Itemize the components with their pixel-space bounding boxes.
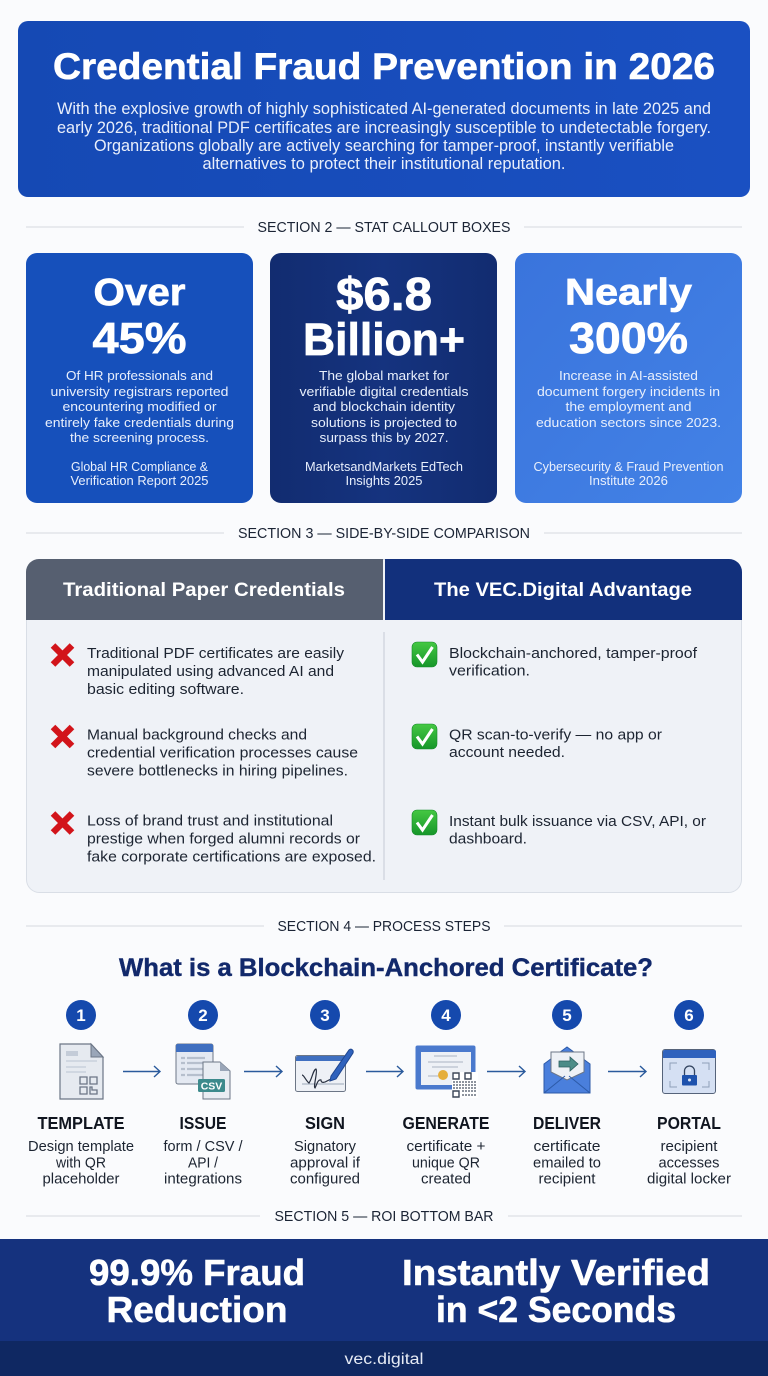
ROI stat: verification speed: in <2 Seconds [436,1289,676,1330]
ROI stat: fraud reduction: 99.9% Fraud [89,1252,305,1293]
benefit 2: QR scan-to-verify — no app or [449,726,662,744]
drawback 2: Manual background checks and [87,726,307,744]
stat card 3: the employment and [566,399,692,414]
stat card 2: Billion+ [303,314,465,365]
arrow [123,1066,160,1077]
left column header [26,559,383,620]
stat card 1: Of HR professionals and [66,368,213,383]
footer: vec.digital [344,1351,424,1368]
stat card 1: Over [94,272,186,314]
step 6 portal: digital locker [647,1172,731,1188]
step 1 template: 1 [76,1006,86,1025]
stat card 2: and blockchain identity [313,399,455,414]
step 1 template: placeholder [42,1172,120,1188]
stat card 1 [26,253,253,503]
step 3 sign: 3 [320,1006,330,1025]
step 1 template: Design template [28,1139,134,1155]
step 1 template [28,1000,134,1188]
ROI stat: verification speed [402,1252,710,1330]
step 2 issue [164,1000,243,1188]
stat card 1: university registrars reported [50,384,228,399]
step 5 deliver: DELIVER [533,1113,601,1133]
stat card 2: The global market for [319,368,450,383]
stat card 3: document forgery incidents in [537,384,720,399]
step 2 issue: form / CSV / [164,1139,243,1155]
drawback 1: basic editing software. [87,681,244,698]
stat card 2: surpass this by 2027. [320,430,448,445]
drawback 2: severe bottlenecks in hiring pipelines. [87,762,348,780]
step 5 deliver: 5 [562,1006,572,1025]
ROI bottom bar [0,1239,768,1342]
stat card 2: Insights 2025 [346,473,422,488]
arrow [608,1066,646,1077]
stat card 1: 45% [92,314,186,363]
right column header: The VEC.Digital Advantage [434,580,692,601]
drawback 3 [53,812,376,866]
step 1 template: with QR [55,1156,106,1172]
stat card 2 [270,253,497,503]
step 6 portal [647,1000,731,1188]
step 6 portal: PORTAL [657,1113,721,1133]
header intro text: With the explosive growth of highly sophisticated AI-generated documents in late 2025 and [57,100,711,118]
step 3 sign: Signatory [294,1139,357,1155]
title: Credential Fraud Prevention in 2026 [53,46,715,87]
step 4 generate: GENERATE [402,1113,490,1133]
header intro text: alternatives to protect their institutional reputation. [202,155,566,173]
benefit 1 [412,642,698,680]
stat card 2: $6.8 [336,268,432,320]
step 4 generate: unique QR [412,1156,480,1172]
step 6 portal: recipient [660,1139,718,1155]
benefit 3: Instant bulk issuance via CSV, API, or [449,813,706,830]
benefit 2 [412,724,662,761]
stat card 2: MarketsandMarkets EdTech [305,459,463,474]
section 4 label: SECTION 4 — PROCESS STEPS [278,919,490,935]
ROI stat: fraud reduction [89,1252,305,1330]
step 4 generate: certificate + [406,1139,486,1155]
step 2 issue: API / [188,1156,219,1172]
drawback 3: Loss of brand trust and institutional [87,812,333,830]
benefit 1: verification. [449,662,530,680]
stat card 3: Cybersecurity & Fraud Prevention [534,459,724,474]
stat card 3: education sectors since 2023. [536,415,721,430]
step 3 sign: SIGN [305,1113,345,1133]
step 6 portal: 6 [684,1006,694,1025]
icon: signature window with pen [296,1049,353,1092]
drawback 2: credential verification processes cause [87,744,358,762]
section 5 label: SECTION 5 — ROI BOTTOM BAR [274,1209,494,1225]
step 5 deliver: recipient [538,1172,596,1188]
stat card 2: verifiable digital credentials [300,384,469,399]
icon: form and CSV file [176,1044,230,1099]
stat card 3: Increase in AI-assisted [559,368,698,383]
stat card 1: Verification Report 2025 [70,473,208,488]
drawback 1: manipulated using advanced AI and [87,663,334,680]
icon: form and CSV file: CSV [201,1080,222,1092]
benefit 2: account needed. [449,744,565,761]
drawback 3: fake corporate certifications are exposed. [87,848,376,866]
step 4 generate: 4 [441,1006,451,1025]
ROI stat: verification speed: Instantly Verified [402,1252,710,1293]
step 3 sign [290,1000,361,1188]
stat card 3: 300% [569,314,688,363]
ROI stat: fraud reduction: Reduction [106,1289,288,1330]
stat card 2: solutions is projected to [311,415,457,430]
icon: portal window with padlock [662,1050,716,1094]
step 3 sign: configured [290,1172,360,1188]
arrow [487,1066,525,1077]
step 5 deliver [533,1000,601,1188]
drawback 1: Traditional PDF certificates are easily [87,645,344,662]
section 3 label: SECTION 3 — SIDE-BY-SIDE COMPARISON [238,526,530,542]
step 2 issue: 2 [198,1006,208,1025]
arrow [366,1066,403,1077]
benefit 3: dashboard. [449,830,527,848]
right column header [385,559,742,620]
drawback 1 [53,645,344,698]
left column header: Traditional Paper Credentials [63,580,345,601]
arrow [244,1066,282,1077]
icon: certificate with QR [416,1046,478,1098]
step 4 generate: created [421,1172,471,1188]
stat card 1: encountering modified or [62,399,217,414]
step 4 generate [402,1000,490,1188]
footer [0,1341,768,1376]
step 1 template: TEMPLATE [38,1113,124,1133]
step 6 portal: accesses [658,1156,720,1172]
comparison panel [26,559,742,892]
benefit 3 [412,810,706,848]
step 3 sign: approval if [290,1156,361,1172]
stat card 1: Global HR Compliance & [71,459,208,474]
header intro text [57,100,711,173]
icon: document with QR [60,1044,103,1099]
stat card 1: entirely fake credentials during [45,415,234,430]
icon: envelope with arrow [544,1047,590,1093]
stat card 1: the screening process. [70,430,209,445]
step 5 deliver: certificate [534,1139,600,1155]
drawback 3: prestige when forged alumni records or [87,830,360,848]
header intro text: Organizations globally are actively searching for tamper-proof, instantly verifiable [94,137,674,155]
process heading: What is a Blockchain-Anchored Certificate? [119,954,653,982]
step 2 issue: integrations [164,1172,242,1188]
header intro text: early 2026, traditional PDF certificates are increasingly susceptible to undetectable forgery. [57,119,711,137]
header panel [18,21,750,197]
step 5 deliver: emailed to [533,1156,601,1172]
drawback 2 [53,726,358,780]
benefit 1: Blockchain-anchored, tamper-proof [449,645,698,662]
section 2 label: SECTION 2 — STAT CALLOUT BOXES [258,220,510,236]
step 2 issue: ISSUE [180,1113,226,1133]
stat card 3 [515,253,742,503]
stat card 3: Nearly [565,272,692,312]
stat card 3: Institute 2026 [589,473,668,488]
